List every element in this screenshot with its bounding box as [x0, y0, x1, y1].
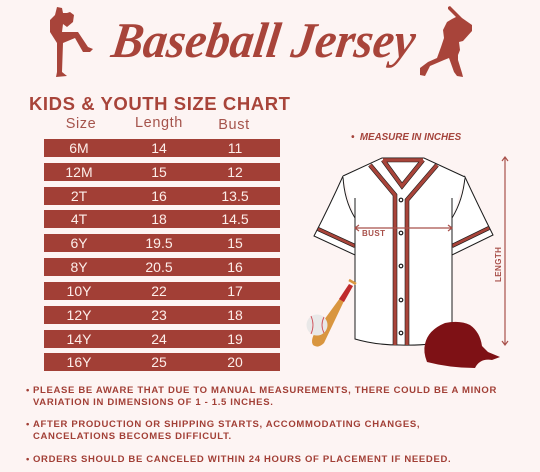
note: measure in inches: • MEASURE IN INCHES	[351, 132, 461, 143]
collar stripes	[370, 160, 437, 345]
notes: bullet list: •	[26, 419, 30, 430]
row: 6M: 6M	[69, 140, 89, 156]
icon: cap	[424, 322, 500, 368]
row: 16Y: 25	[151, 354, 167, 370]
arrow: length	[502, 157, 508, 345]
row: 6M: 14	[151, 140, 167, 156]
label: length: LENGTH	[494, 247, 503, 282]
row: 14Y: 14Y	[67, 331, 91, 347]
column header: bust: Bust	[218, 117, 250, 133]
arrow: bust	[355, 225, 452, 231]
row: 4T: 14.5	[221, 211, 249, 227]
row: 8Y: 16	[227, 259, 243, 275]
diagram: jersey with measurements	[306, 156, 508, 368]
column header: length: Length	[135, 115, 183, 131]
row: 12Y: 12Y	[67, 307, 91, 323]
label: bust: BUST	[362, 229, 385, 238]
row: 12M: 12	[227, 164, 243, 180]
row: 4T: 18	[151, 211, 167, 227]
row: 14Y: 24	[151, 331, 167, 347]
note 3: ORDERS SHOULD BE CANCELED WITHIN 24 HOURS OF PLACEMENT IF NEEDED.	[33, 454, 451, 465]
table header	[66, 115, 250, 133]
row: 10Y: 17	[227, 283, 243, 299]
row: 12Y: 18	[227, 307, 243, 323]
note 1: VARIATION IN DIMENSIONS OF 1 - 1.5 INCHES.	[33, 397, 274, 408]
row: 2T: 2T	[71, 188, 87, 204]
row: 6Y	[44, 234, 280, 252]
jersey body	[343, 158, 465, 345]
jersey sleeves	[314, 176, 493, 255]
row: 12M	[44, 163, 280, 181]
row: 10Y	[44, 282, 280, 300]
row: 12Y: 23	[151, 307, 167, 323]
row: 16Y	[44, 353, 280, 371]
row: 14Y	[44, 330, 280, 348]
row: 6Y: 15	[227, 235, 243, 251]
row: 6M: 11	[228, 140, 242, 156]
row: 12M: 15	[151, 164, 167, 180]
row: 2T: 16	[151, 188, 167, 204]
notes: bullet list: •	[26, 385, 30, 396]
note 1	[26, 385, 497, 408]
row: 10Y: 22	[151, 283, 167, 299]
row: 4T: 4T	[71, 211, 87, 227]
note 1: PLEASE BE AWARE THAT DUE TO MANUAL MEASUREMENTS, THERE COULD BE A MINOR	[33, 385, 497, 396]
buttons	[399, 198, 403, 335]
icon: baseball bat	[312, 280, 356, 347]
note 2: CANCELATIONS BECOMES DIFFICULT.	[33, 431, 232, 442]
row: 2T: 13.5	[221, 188, 249, 204]
row: 16Y: 16Y	[67, 354, 91, 370]
title: Baseball Jersey	[108, 12, 420, 68]
heading: KIDS & YOUTH SIZE CHART	[29, 93, 291, 114]
row: 8Y	[44, 258, 280, 276]
row: 6Y: 6Y	[70, 235, 88, 251]
notes: bullet list	[26, 385, 497, 465]
row: 4T	[44, 210, 280, 228]
note 2	[26, 419, 420, 442]
icon: batter silhouette	[420, 6, 472, 77]
icon: baseball	[306, 314, 328, 336]
cuff stripes	[318, 228, 489, 246]
row: 10Y: 10Y	[67, 283, 91, 299]
row: 14Y: 19	[227, 331, 243, 347]
notes: bullet list: •	[26, 454, 30, 465]
row: 16Y: 20	[227, 354, 243, 370]
row: 6M	[44, 139, 280, 157]
row: 2T	[44, 187, 280, 205]
icon: pitcher silhouette	[50, 7, 93, 77]
row: 12M: 12M	[65, 164, 93, 180]
row: 8Y: 8Y	[70, 259, 88, 275]
row: 12Y	[44, 306, 280, 324]
row: 8Y: 20.5	[145, 259, 173, 275]
column header: size: Size	[66, 116, 96, 132]
row: 6Y: 19.5	[145, 235, 173, 251]
note 2: AFTER PRODUCTION OR SHIPPING STARTS, ACCOMMODATING CHANGES,	[33, 419, 420, 430]
